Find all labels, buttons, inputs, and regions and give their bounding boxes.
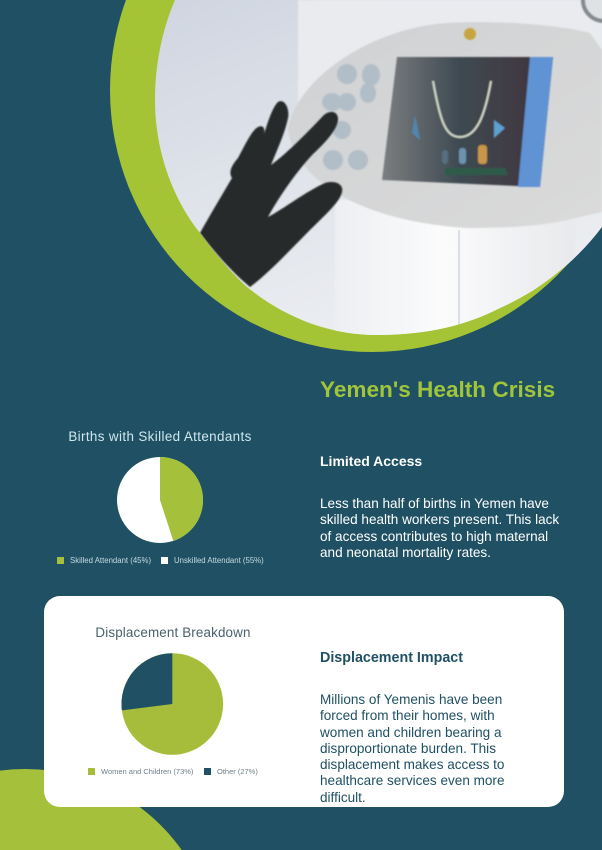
panel: births <box>57 429 264 565</box>
text: limited access: and neonatal mortality rates. <box>320 545 491 560</box>
title: Yemen's Health Crisis <box>320 377 555 402</box>
legend: displacement: Women and Children (73%) <box>101 767 193 776</box>
radiation symbol <box>464 28 476 40</box>
gloved hand <box>200 101 342 287</box>
bottom-left green circle <box>0 769 182 850</box>
text: limited access: Less than half of births in Yemen have <box>320 496 549 511</box>
pie chart: displacement <box>122 653 224 755</box>
device panel <box>288 22 602 228</box>
legend: displacement <box>88 767 258 776</box>
text: limited access <box>320 496 560 560</box>
text: limited access: of access contributes to high maternal <box>320 529 548 544</box>
photo <box>150 0 602 340</box>
chart title: displacement: Displacement Breakdown <box>95 625 251 640</box>
pie chart: births <box>117 457 203 543</box>
heading: displacement impact: Displacement Impact <box>320 650 463 666</box>
text: displacement impact: healthcare services even more <box>320 773 504 788</box>
legend: births: Unskilled Attendant (55%) <box>174 556 264 565</box>
chart title: births: Births with Skilled Attendants <box>68 429 252 444</box>
legend: births <box>57 556 264 565</box>
text: displacement impact: displacement makes access to <box>320 757 504 772</box>
text: displacement impact: women and children bearing a <box>320 725 502 740</box>
text: displacement impact: disproportionate burden. This <box>320 741 496 756</box>
text: displacement impact: difficult. <box>320 790 366 805</box>
hero graphic: green circle with photo of medical device <box>110 0 602 352</box>
heading: limited access: Limited Access <box>320 453 422 469</box>
text: displacement impact <box>320 692 504 805</box>
legend: births: Skilled Attendant (45%) <box>70 556 151 565</box>
dial corner top right <box>583 0 602 21</box>
text: limited access: skilled health workers present. This lack <box>320 512 559 527</box>
green circle backdrop <box>110 0 602 352</box>
device buttons <box>322 64 380 170</box>
panel: displacement card <box>44 596 564 807</box>
legend: displacement: Other (27%) <box>217 767 258 776</box>
screen <box>382 57 553 187</box>
text: displacement impact: Millions of Yemenis have been <box>320 692 502 707</box>
text: displacement impact: forced from their homes, with <box>320 708 495 723</box>
